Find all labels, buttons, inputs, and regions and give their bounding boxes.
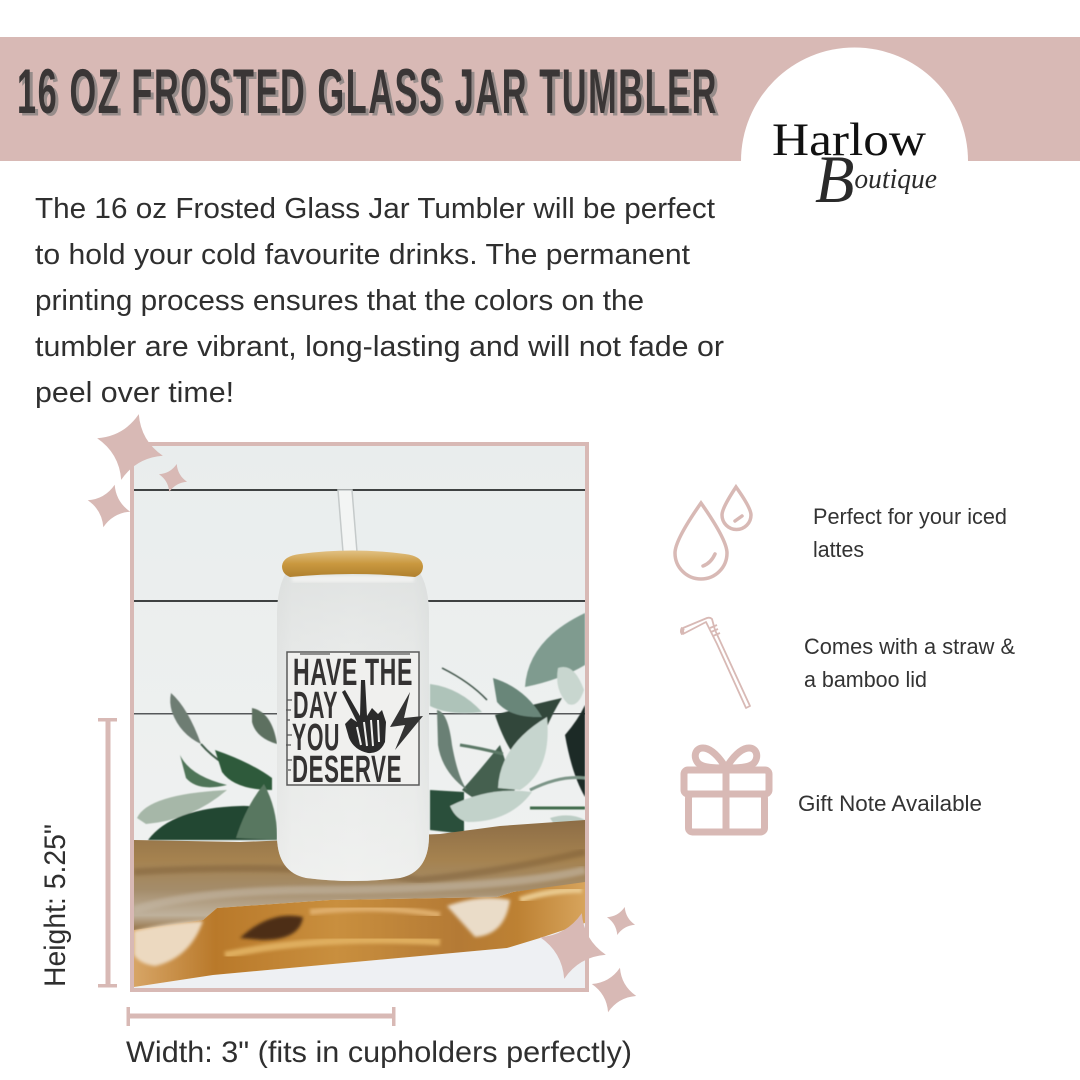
printed design: Have the day you deserve: HAVE THE	[293, 652, 413, 694]
printed design: Have the day you deserve: DAY	[293, 685, 338, 727]
glass straw	[338, 490, 357, 552]
logo: Harlow Boutique: B	[815, 141, 854, 217]
description paragraph: The 16 oz Frosted Glass Jar Tumbler will be perfect	[35, 193, 715, 225]
wood burl edge	[134, 882, 585, 987]
straw and lid text	[804, 634, 1015, 692]
gift note text: Gift Note Available	[798, 791, 982, 816]
straw and lid text: a bamboo lid	[804, 667, 927, 692]
description paragraph: tumbler are vibrant, long-lasting and will not fade or	[35, 331, 724, 363]
shiplap wall	[134, 446, 585, 846]
sparkles top left	[82, 405, 191, 533]
logo: Harlow Boutique	[772, 114, 937, 217]
description paragraph: peel over time!	[35, 377, 234, 409]
description paragraph: printing process ensures that the colors on the	[35, 285, 644, 317]
straw and lid text: Comes with a straw &	[804, 634, 1015, 659]
icon: water drops	[675, 487, 751, 579]
icon: straw	[681, 618, 750, 708]
iced lattes text: lattes	[813, 537, 864, 562]
photo border	[132, 444, 587, 990]
description paragraph	[35, 193, 724, 409]
header band	[0, 37, 1080, 161]
frosted jar	[277, 550, 429, 881]
description paragraph: to hold your cold favourite drinks. The permanent	[35, 239, 690, 271]
logo arch	[741, 47, 968, 161]
printed design: Have the day you deserve: YOU	[292, 717, 340, 759]
height dimension line	[98, 718, 117, 988]
foliage	[137, 613, 585, 840]
iced lattes text	[813, 504, 1007, 562]
lightning bolt	[390, 692, 423, 750]
printed design: Have the day you deserve: DESERVE	[292, 749, 402, 791]
icon: gift box	[684, 748, 769, 832]
height label: Height: 5.25"	[39, 824, 72, 987]
width dimension line	[126, 1007, 396, 1026]
width label: Width: 3" (fits in cupholders perfectly)	[126, 1036, 632, 1069]
wood board	[134, 820, 585, 932]
printed design: Have the day you deserve	[286, 652, 423, 791]
title	[17, 57, 721, 130]
iced lattes text: Perfect for your iced	[813, 504, 1007, 529]
skeleton hand	[342, 680, 386, 753]
sparkles bottom right	[531, 903, 642, 1018]
product photo panel	[132, 444, 587, 990]
logo: Harlow Boutique: outique	[854, 163, 937, 195]
bamboo lid	[282, 550, 423, 577]
logo: Harlow Boutique: Harlow	[772, 114, 926, 166]
table surface below board	[134, 923, 585, 990]
